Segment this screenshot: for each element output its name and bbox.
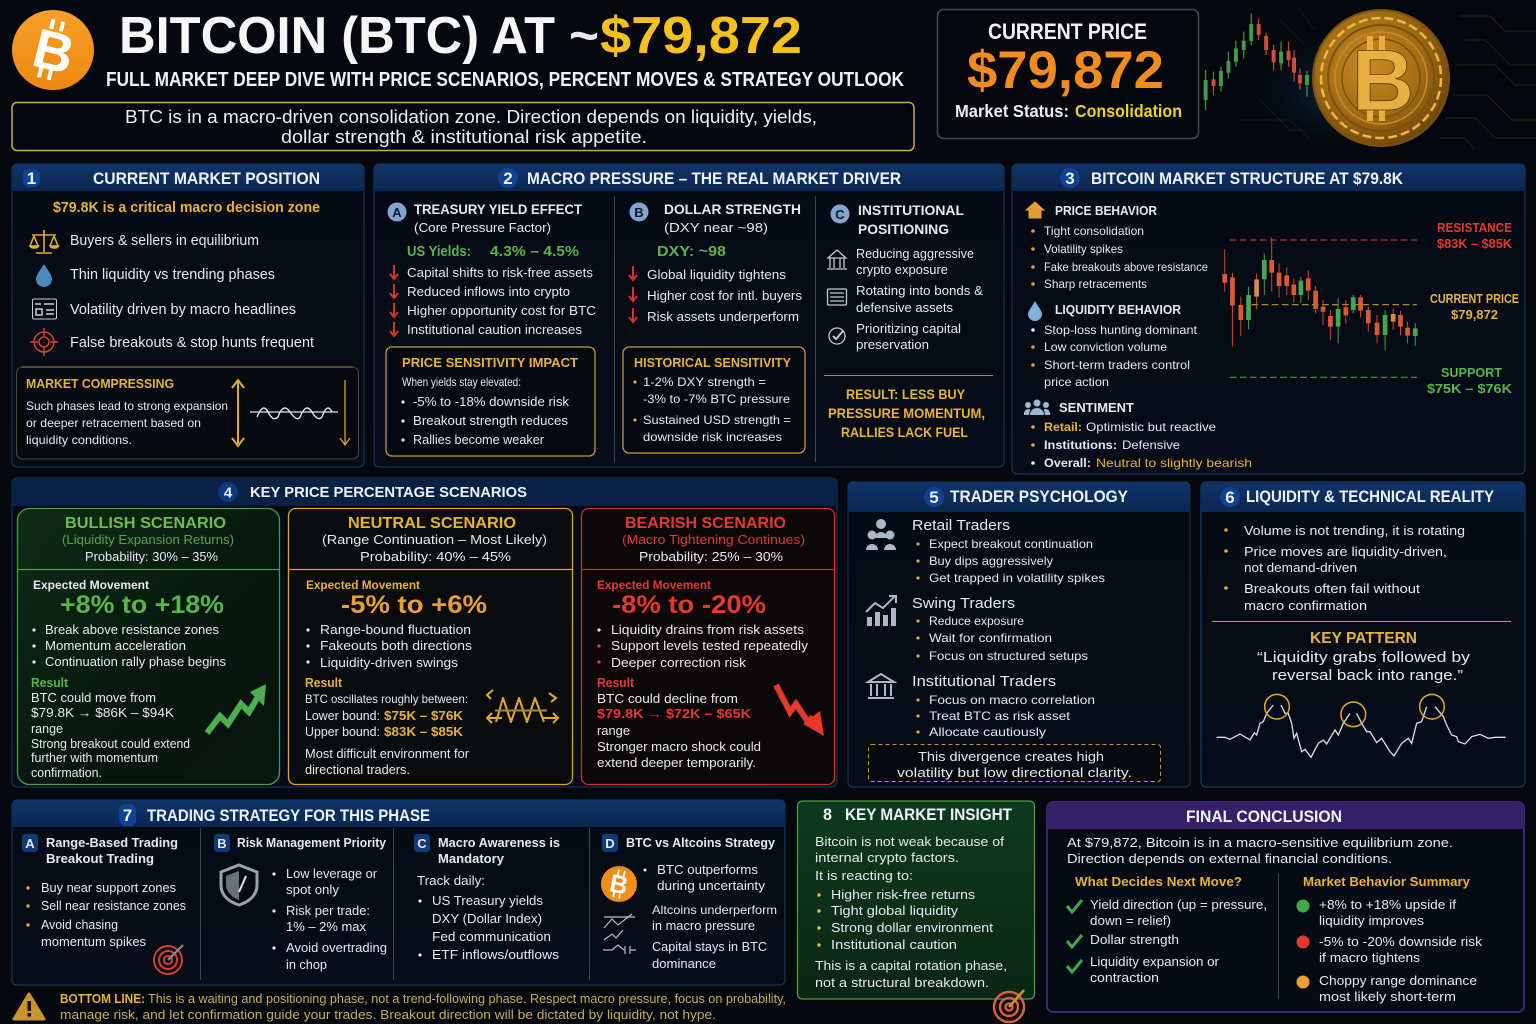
column C: macro awareness: US Treasury yields xyxy=(432,893,544,908)
result: less buy pressure: RALLIES LACK FUEL xyxy=(841,424,968,440)
column A: treasury yield effect: 4.3% – 4.5% xyxy=(490,243,579,260)
card: neutral scenario: Most difficult environment for xyxy=(305,746,470,761)
liquidity bullets: Volume is not trending, it is rotating xyxy=(1244,523,1465,538)
column A: range-based trading: momentum spikes xyxy=(41,934,146,949)
key pattern quote: KEY PATTERN xyxy=(1310,630,1417,647)
insight text: Strong dollar environment xyxy=(831,920,993,935)
card: bullish scenario: BULLISH SCENARIO xyxy=(65,515,226,532)
card: neutral scenario: (Range Continuation – Most Likely) xyxy=(322,532,547,547)
column B: risk management: Avoid overtrading xyxy=(286,940,387,955)
card: neutral scenario: Lower bound: xyxy=(305,708,380,723)
callout: divergence: volatility but low directional clarity. xyxy=(897,765,1132,780)
liquidity behavior list xyxy=(1028,301,1198,389)
icon: red down arrow xyxy=(776,685,824,736)
label: current price: CURRENT PRICE xyxy=(1430,291,1519,306)
heading: panel 1: 1 xyxy=(27,169,36,188)
insight text: not a structural breakdown. xyxy=(815,975,989,990)
list: what decides next move: What Decides Next Move? xyxy=(1075,874,1242,889)
card: neutral scenario: Range-bound fluctuation xyxy=(320,622,471,637)
retail traders: Buy dips aggressively xyxy=(929,554,1053,568)
swing traders: Reduce exposure xyxy=(929,614,1024,628)
heading: panel 7: TRADING STRATEGY FOR THIS PHASE xyxy=(147,806,430,825)
bottom line note: manage risk, and let confirmation guide your trades. Breakout direction will be dictated by liquidity, not hype. xyxy=(60,1007,716,1022)
retail traders xyxy=(866,517,1105,585)
list: market behavior summary: most likely short-term xyxy=(1319,989,1456,1004)
insight text: This is a capital rotation phase, xyxy=(815,958,1007,973)
insight text: It is reacting to: xyxy=(815,868,913,883)
summary banner xyxy=(12,102,914,150)
column B: dollar strength: DOLLAR STRENGTH xyxy=(664,201,801,217)
column B: dollar strength: Risk assets underperform xyxy=(647,309,799,324)
candlestick chart xyxy=(1222,237,1418,377)
price behavior list: Fake breakouts above resistance xyxy=(1044,260,1208,274)
bottom line note: BOTTOM LINE: xyxy=(60,991,145,1006)
card: bullish scenario xyxy=(18,508,280,784)
callout: market compressing: Such phases lead to strong expansion xyxy=(26,399,228,413)
icon: altcoin charts xyxy=(603,914,636,954)
price behavior list: Sharp retracements xyxy=(1044,277,1147,291)
column B: risk management xyxy=(214,834,387,972)
liquidity behavior list: Low conviction volume xyxy=(1044,340,1167,354)
card: bullish scenario: Probability: 30% – 35% xyxy=(85,549,218,564)
column C: institutional positioning: defensive assets xyxy=(856,300,953,315)
institutional traders: Allocate cautiously xyxy=(929,725,1046,739)
retail traders: Get trapped in volatility spikes xyxy=(929,571,1105,585)
current price card: CURRENT PRICE xyxy=(988,19,1147,44)
label: support: SUPPORT xyxy=(1441,365,1502,380)
icon: water drop xyxy=(36,264,52,287)
title: $79,872 xyxy=(600,7,802,65)
panel 5: trader psychology xyxy=(848,482,1190,787)
column A: range-based trading: Breakout Trading xyxy=(46,851,154,866)
card: neutral scenario: Liquidity-driven swings xyxy=(320,655,459,670)
text: volatility: Volatility driven by macro headlines xyxy=(70,301,296,318)
price behavior list xyxy=(1026,202,1208,291)
column B: risk management: Low leverage or xyxy=(286,866,378,881)
column B: dollar strength xyxy=(629,201,803,324)
sentiment list: Overall: xyxy=(1044,456,1091,470)
card: bullish scenario: Expected Movement xyxy=(33,578,149,592)
column A: range-based trading: Buy near support zones xyxy=(41,880,176,895)
card: bearish scenario: $79.8K → $72K – $65K xyxy=(597,706,752,721)
column A: treasury yield effect: (Core Pressure Factor) xyxy=(414,220,551,235)
sentiment list: Optimistic but reactive xyxy=(1086,420,1216,434)
insight text: Higher risk-free returns xyxy=(831,887,976,902)
icon: green up arrow xyxy=(207,684,266,733)
list: what decides next move: Dollar strength xyxy=(1090,932,1179,947)
column B: dollar strength: Global liquidity tightens xyxy=(647,267,787,282)
icon: scales xyxy=(30,230,58,253)
panel: final conclusion xyxy=(1047,802,1524,1012)
callout: historical sensitivity xyxy=(623,347,805,453)
summary banner: BTC is in a macro-driven consolidation zone. Direction depends on liquidity, yields, xyxy=(125,107,817,127)
panel 7: trading strategy xyxy=(12,800,785,985)
insight text: Bitcoin is not weak because of xyxy=(815,834,1004,849)
callout: price sensitivity impact: When yields stay elevated: xyxy=(402,375,521,389)
liquidity bullets: Price moves are liquidity-driven, xyxy=(1244,544,1447,559)
card: neutral scenario: Fakeouts both directions xyxy=(320,638,473,653)
heading: panel 4: KEY PRICE PERCENTAGE SCENARIOS xyxy=(250,484,527,501)
card: neutral scenario: Upper bound: xyxy=(305,724,380,739)
column B: dollar strength: DXY: ~98 xyxy=(657,243,726,260)
sentiment list: Neutral to slightly bearish xyxy=(1096,456,1252,470)
column B: dollar strength: (DXY near ~98) xyxy=(664,220,768,235)
callout: price sensitivity impact: -5% to -18% downside risk xyxy=(413,394,569,409)
column D: btc vs altcoins: Capital stays in BTC xyxy=(652,939,767,954)
heading: panel 6: LIQUIDITY & TECHNICAL REALITY xyxy=(1246,487,1495,506)
list: what decides next move: contraction xyxy=(1090,970,1159,985)
card: bearish scenario: extend deeper temporarily. xyxy=(597,755,756,770)
label: resistance: RESISTANCE xyxy=(1437,220,1512,235)
list: market behavior summary: -5% to -20% downside risk xyxy=(1319,934,1483,949)
column C: institutional positioning: preservation xyxy=(856,337,929,352)
institutional traders xyxy=(868,673,1095,739)
result: less buy pressure: PRESSURE MOMENTUM, xyxy=(828,405,985,421)
heading: panel 7: 7 xyxy=(123,806,132,825)
insight text: internal crypto factors. xyxy=(815,850,959,865)
column C: macro awareness: Macro Awareness is xyxy=(438,835,560,850)
key pattern quote: “Liquidity grabs followed by xyxy=(1257,649,1471,666)
card: neutral scenario: directional traders. xyxy=(305,762,410,777)
column B: dollar strength: Higher cost for intl. buyers xyxy=(647,288,803,303)
column A: range-based trading xyxy=(22,834,186,974)
list: market behavior summary xyxy=(1296,874,1483,1004)
column C: institutional positioning: POSITIONING xyxy=(858,221,949,237)
card: bullish scenario: confirmation. xyxy=(31,765,102,780)
price behavior list: Tight consolidation xyxy=(1044,224,1144,238)
heading: panel 5: 5 xyxy=(929,488,939,507)
panel 6: liquidity and technical reality xyxy=(1201,482,1525,787)
heading: panel 4: 4 xyxy=(224,484,233,502)
card: bearish scenario: Liquidity drains from risk assets xyxy=(611,622,805,637)
panel 4: key price percentage scenarios xyxy=(12,478,837,787)
card: neutral scenario: -5% to +6% xyxy=(341,591,487,619)
liquidity behavior list: Short-term traders control xyxy=(1044,358,1190,372)
column A: treasury yield effect: US Yields: xyxy=(407,243,471,260)
card: bearish scenario: Result xyxy=(597,675,635,690)
panel 8: key market insight xyxy=(798,801,1034,1022)
logo: bitcoin circle xyxy=(12,10,94,90)
card: bearish scenario xyxy=(582,508,834,784)
column B: risk management: B xyxy=(217,836,227,851)
column C: macro awareness: Track daily: xyxy=(417,873,485,888)
icon: range oscillation xyxy=(487,690,558,723)
callout: market compressing xyxy=(16,367,358,459)
column B: risk management: Risk Management Priority xyxy=(237,835,387,850)
list: what decides next move xyxy=(1067,874,1267,985)
list: what decides next move: Yield direction (up = pressure, xyxy=(1090,897,1267,912)
column A: treasury yield effect: A xyxy=(392,205,402,220)
icon: target with arrow xyxy=(994,990,1024,1022)
callout: divergence xyxy=(868,744,1160,782)
price behavior list: Volatility spikes xyxy=(1044,242,1123,256)
callout: historical sensitivity: HISTORICAL SENSITIVITY xyxy=(634,355,791,370)
sentiment list: Retail: xyxy=(1044,420,1082,434)
card: neutral scenario: $83K – $85K xyxy=(384,724,464,739)
callout: price sensitivity impact xyxy=(386,347,595,456)
column A: range-based trading: Sell near resistance zones xyxy=(41,898,186,913)
card: bearish scenario: Support levels tested repeatedly xyxy=(611,638,809,653)
column D: btc vs altcoins: during uncertainty xyxy=(657,878,766,893)
current price card: Consolidation xyxy=(1075,101,1182,121)
current price card xyxy=(938,10,1198,138)
callout: market compressing: or deeper retracement based on xyxy=(26,416,201,430)
conclusion summary xyxy=(1067,835,1453,866)
liquidity behavior list: LIQUIDITY BEHAVIOR xyxy=(1055,302,1182,317)
title: BITCOIN (BTC) AT xyxy=(119,7,555,65)
icon: compression arrows and wave xyxy=(232,380,350,446)
swing traders: Swing Traders xyxy=(912,595,1015,612)
card: neutral scenario: BTC oscillates roughly between: xyxy=(305,692,468,706)
column D: btc vs altcoins: Altcoins underperform xyxy=(652,903,777,917)
column A: range-based trading: Range-Based Trading xyxy=(46,835,178,850)
heading: panel 1: CURRENT MARKET POSITION xyxy=(93,169,320,188)
list: market behavior summary: Choppy range dominance xyxy=(1319,973,1477,988)
card: neutral scenario: Expected Movement xyxy=(306,578,420,592)
sentiment list: SENTIMENT xyxy=(1059,400,1134,415)
card: bullish scenario: Strong breakout could extend xyxy=(31,736,190,751)
title: ~ xyxy=(569,7,599,65)
card: neutral scenario: Result xyxy=(305,675,343,690)
sentiment list xyxy=(1024,400,1252,470)
key pattern quote: reversal back into range.” xyxy=(1272,667,1463,684)
card: bearish scenario: Probability: 25% – 30% xyxy=(639,549,783,564)
column C: macro awareness: Fed communication xyxy=(432,929,551,944)
heading: panel 5: TRADER PSYCHOLOGY xyxy=(950,487,1129,506)
subtitle: FULL MARKET DEEP DIVE WITH PRICE SCENARIOS, PERCENT MOVES & STRATEGY OUTLOOK xyxy=(106,69,904,91)
heading: panel 6: 6 xyxy=(1225,488,1235,507)
label: support: $75K – $76K xyxy=(1427,381,1513,396)
card: bullish scenario: further with momentum xyxy=(31,750,158,765)
card: bullish scenario: (Liquidity Expansion Returns) xyxy=(62,532,234,547)
label: resistance: $83K – $85K xyxy=(1437,236,1513,251)
liquidity bullets: Breakouts often fail without xyxy=(1244,581,1420,596)
icon: bitcoin xyxy=(601,866,637,902)
heading: panel 2: MACRO PRESSURE – THE REAL MARKET DRIVER xyxy=(527,169,901,188)
column C: macro awareness: DXY (Dollar Index) xyxy=(432,911,542,926)
label: current price xyxy=(1430,291,1519,322)
result: less buy pressure xyxy=(828,386,985,440)
conclusion summary: At $79,872, Bitcoin is in a macro-sensitive equilibrium zone. xyxy=(1067,835,1453,850)
list: market behavior summary: liquidity improves xyxy=(1319,913,1425,928)
heading: panel 8: KEY MARKET INSIGHT xyxy=(845,805,1013,824)
column D: btc vs altcoins: BTC outperforms xyxy=(657,862,758,877)
hero art: candlesticks and gold coin: B xyxy=(1352,33,1414,129)
card: neutral scenario: Probability: 40% – 45% xyxy=(360,549,511,564)
bottom line note xyxy=(14,991,786,1022)
conclusion summary: Direction depends on external financial conditions. xyxy=(1067,851,1392,866)
card: bullish scenario: BTC could move from xyxy=(31,690,156,705)
column B: risk management: in chop xyxy=(286,957,327,972)
heading: final conclusion: FINAL CONCLUSION xyxy=(1186,807,1342,826)
column B: risk management: spot only xyxy=(286,882,339,897)
column B: dollar strength: B xyxy=(634,205,644,220)
column B: risk management: 1% – 2% max xyxy=(286,919,366,934)
liquidity bullets xyxy=(1224,523,1465,613)
sentiment list: Defensive xyxy=(1122,438,1180,452)
card: bearish scenario: BEARISH SCENARIO xyxy=(625,515,786,532)
icon: bitcoin: B xyxy=(607,869,631,901)
card: neutral scenario xyxy=(288,508,572,784)
heading: panel 8: 8 xyxy=(823,805,832,824)
swing traders: Focus on structured setups xyxy=(929,649,1088,663)
callout: historical sensitivity: -3% to -7% BTC pressure xyxy=(643,392,790,406)
list: market behavior summary: +8% to +18% upside if xyxy=(1319,897,1456,912)
list: what decides next move: Liquidity expansion or xyxy=(1090,954,1220,969)
heading: panel 3: 3 xyxy=(1065,169,1075,188)
card: bearish scenario: Expected Movement xyxy=(597,578,711,592)
column A: range-based trading: Avoid chasing xyxy=(41,917,118,932)
swing traders xyxy=(866,595,1088,663)
icon: shield xyxy=(221,865,257,905)
column C: institutional positioning xyxy=(827,202,983,352)
swing traders: Wait for confirmation xyxy=(929,631,1052,645)
callout: divergence: This divergence creates high xyxy=(918,749,1104,764)
label: current price: $79,872 xyxy=(1451,307,1498,322)
card: bullish scenario: Momentum acceleration xyxy=(45,638,186,653)
list: market behavior summary: if macro tightens xyxy=(1319,950,1421,965)
callout: price sensitivity impact: PRICE SENSITIVITY IMPACT xyxy=(402,355,578,370)
callout: historical sensitivity: 1-2% DXY strength = xyxy=(643,375,766,389)
card: bullish scenario: Break above resistance zones xyxy=(45,622,219,637)
card: bearish scenario: Stronger macro shock could xyxy=(597,739,761,754)
column C: macro awareness: C xyxy=(417,836,427,851)
card: neutral scenario: $75K – $76K xyxy=(384,708,464,723)
card: bearish scenario: (Macro Tightening Continues) xyxy=(622,532,805,547)
label: resistance xyxy=(1437,220,1513,251)
card: neutral scenario: NEUTRAL SCENARIO xyxy=(348,515,516,532)
result: less buy pressure: RESULT: LESS BUY xyxy=(846,386,966,402)
price behavior list: PRICE BEHAVIOR xyxy=(1055,203,1158,218)
column A: treasury yield effect: Capital shifts to risk-free assets xyxy=(407,265,594,280)
icon: warning triangle xyxy=(14,994,44,1019)
column A: treasury yield effect: TREASURY YIELD EFFECT xyxy=(414,201,582,217)
liquidity bullets: macro confirmation xyxy=(1244,598,1367,613)
column D: btc vs altcoins: BTC vs Altcoins Strategy xyxy=(626,835,776,850)
column C: institutional positioning: Rotating into bonds & xyxy=(856,283,983,298)
card: bullish scenario: range xyxy=(31,721,63,736)
liquidity behavior list: price action xyxy=(1044,375,1109,389)
column C: macro awareness xyxy=(414,834,560,962)
insight text: Tight global liquidity xyxy=(831,903,959,918)
card: bearish scenario: range xyxy=(597,723,630,738)
column A: treasury yield effect xyxy=(388,201,596,337)
column C: macro awareness: Mandatory xyxy=(438,851,505,866)
column A: treasury yield effect: Institutional caution increases xyxy=(407,322,583,337)
insight text xyxy=(815,834,1007,990)
bottom line note: This is a waiting and positioning phase, not a trend-following phase. Respect macro pressure, focus on probability, xyxy=(148,991,786,1006)
column B: risk management: Risk per trade: xyxy=(286,903,370,918)
column C: institutional positioning: INSTITUTIONAL xyxy=(858,202,964,218)
panel 3: bitcoin market structure xyxy=(1012,164,1525,474)
column D: btc vs altcoins: dominance xyxy=(652,956,716,971)
column D: btc vs altcoins: D xyxy=(605,836,615,851)
institutional traders: Focus on macro correlation xyxy=(929,693,1095,707)
sentiment list: Institutions: xyxy=(1044,438,1117,452)
retail traders: Retail Traders xyxy=(912,517,1010,534)
column D: btc vs altcoins xyxy=(601,834,777,971)
logo: bitcoin circle: B xyxy=(27,16,81,86)
subheading: decision zone: $79.8K is a critical macro decision zone xyxy=(53,199,320,216)
current price card: Market Status: xyxy=(955,101,1069,121)
chart: liquidity grab pattern xyxy=(1217,694,1506,757)
callout: market compressing: liquidity conditions. xyxy=(26,433,132,447)
panel 2: macro pressure xyxy=(374,164,1004,467)
liquidity behavior list: Stop-loss hunting dominant xyxy=(1044,323,1198,337)
column D: btc vs altcoins: in macro pressure xyxy=(652,918,755,933)
insight text: Institutional caution xyxy=(831,937,957,952)
callout: price sensitivity impact: Breakout strength reduces xyxy=(413,413,569,428)
card: bullish scenario: Result xyxy=(31,675,69,690)
column A: range-based trading: A xyxy=(25,836,35,851)
column C: institutional positioning: Reducing aggressive xyxy=(856,246,974,261)
title xyxy=(119,7,802,65)
column C: institutional positioning: Prioritizing capital xyxy=(856,321,961,336)
heading: panel 3: BITCOIN MARKET STRUCTURE AT $79.8K xyxy=(1091,169,1404,188)
text: thin liquidity: Thin liquidity vs trending phases xyxy=(70,266,275,283)
card: bullish scenario: +8% to +18% xyxy=(60,591,224,619)
card: bullish scenario: $79.8K → $86K – $94K xyxy=(31,705,174,720)
icon: target xyxy=(154,945,183,974)
card: bearish scenario: Deeper correction risk xyxy=(611,655,747,670)
column C: macro awareness: ETF inflows/outflows xyxy=(432,947,560,962)
text: false breakouts: False breakouts & stop hunts frequent xyxy=(70,334,315,351)
callout: historical sensitivity: downside risk increases xyxy=(643,430,782,444)
label: support xyxy=(1427,365,1513,396)
key pattern quote xyxy=(1257,630,1471,684)
institutional traders: Treat BTC as risk asset xyxy=(929,709,1071,723)
column A: treasury yield effect: Higher opportunity cost for BTC xyxy=(407,303,596,318)
callout: historical sensitivity: Sustained USD strength = xyxy=(643,413,791,427)
liquidity bullets: not demand-driven xyxy=(1244,560,1357,575)
current price card: $79,872 xyxy=(967,41,1164,100)
card: bullish scenario: Continuation rally phase begins xyxy=(45,654,226,669)
summary banner: dollar strength & institutional risk appetite. xyxy=(281,127,647,147)
institutional traders: Institutional Traders xyxy=(912,673,1056,690)
retail traders: Expect breakout continuation xyxy=(929,537,1093,551)
column A: treasury yield effect: Reduced inflows into crypto xyxy=(407,284,570,299)
list: what decides next move: down = relief) xyxy=(1090,913,1171,928)
heading: panel 2: 2 xyxy=(503,169,513,188)
list: market behavior summary: Market Behavior Summary xyxy=(1303,874,1471,889)
column C: institutional positioning: crypto exposure xyxy=(856,262,948,277)
card: bearish scenario: -8% to -20% xyxy=(612,591,766,619)
card: bearish scenario: BTC could decline from xyxy=(597,691,738,706)
callout: price sensitivity impact: Rallies become weaker xyxy=(413,432,545,447)
text: equilibrium: Buyers & sellers in equilibrium xyxy=(70,232,259,249)
icon: target xyxy=(30,328,58,356)
callout: market compressing: MARKET COMPRESSING xyxy=(26,376,174,391)
column C: institutional positioning: C xyxy=(835,207,845,222)
hero art: candlesticks and gold coin xyxy=(1204,0,1536,160)
icon: news xyxy=(32,299,56,319)
